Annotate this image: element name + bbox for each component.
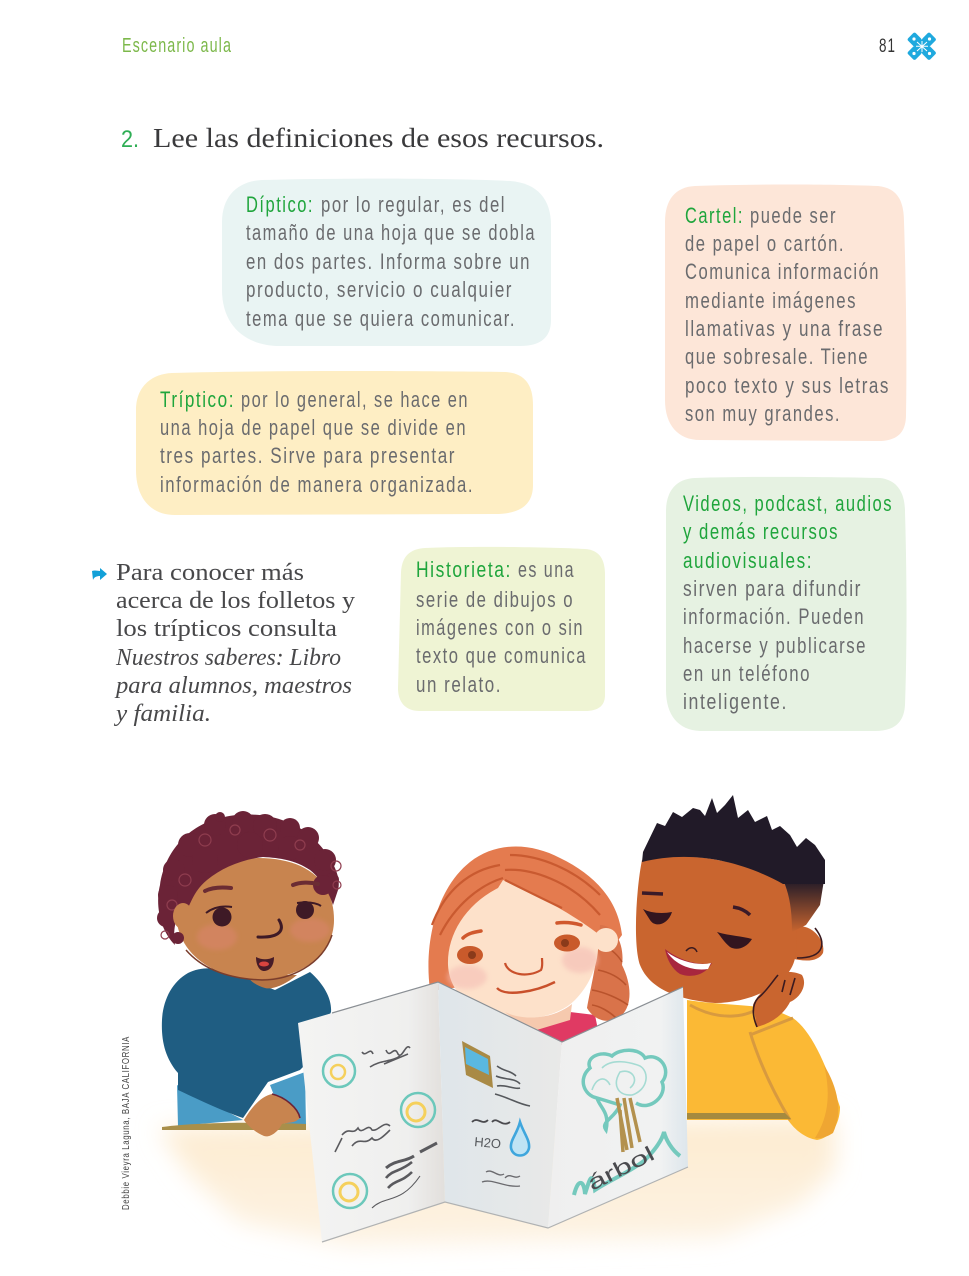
yellow sweater (687, 1000, 840, 1140)
panel: Díptico definition: tamaño de una hoja que se dobla (246, 220, 536, 245)
panel: Díptico definition: producto, servicio o cualquier (246, 277, 513, 302)
table (158, 1118, 835, 1246)
panel: Historieta definition: un relato. (416, 672, 502, 697)
panel: Videos, podcast, audios definition: información. Pueden (683, 604, 865, 629)
right panel (548, 987, 688, 1228)
child: girl with red braid (428, 846, 630, 1045)
panel: Videos, podcast, audios definition: hacerse y publicarse (683, 633, 867, 658)
panel: Cartel definition: poco texto y sus letras (685, 373, 890, 398)
table edge (687, 1113, 791, 1119)
panel: Díptico definition: tema que se quiera comunicar. (246, 306, 516, 331)
panel: Videos, podcast, audios definition: Videos, podcast, audios (683, 491, 893, 516)
handwritten word on leaflet (574, 1132, 680, 1195)
panel: Historieta definition: es una (518, 557, 575, 582)
spiky hair (642, 795, 825, 884)
panel: Cartel definition: mediante imágenes (685, 288, 857, 313)
left panel doodles (323, 1047, 437, 1208)
panel: Historieta definition: serie de dibujos o (416, 587, 574, 612)
leaflet (298, 982, 688, 1242)
panel: Videos, podcast, audios definition: inteligente. (683, 689, 788, 714)
page number: 81 (879, 36, 896, 57)
smile (665, 949, 712, 976)
cheeks (447, 965, 487, 989)
handwritten word on leaflet: árbol (584, 1142, 658, 1195)
eyebrows (642, 893, 750, 915)
panel: Historieta definition: Historieta: (416, 557, 512, 582)
nose and mouth (505, 958, 542, 974)
icon: blue arrow (92, 568, 107, 580)
nose (686, 948, 697, 952)
H2O note: H2O (474, 1134, 502, 1151)
braid (587, 925, 630, 1021)
panel: Díptico definition: Díptico: (246, 192, 314, 217)
hand (244, 1094, 300, 1136)
panel: Tríptico definition: por lo general, se hace en (241, 387, 469, 412)
text block: consult Nuestros saberes: y familia. (114, 701, 211, 727)
text block: consult Nuestros saberes: Nuestros saberes: Libro (115, 645, 341, 671)
mouth (256, 957, 274, 971)
panel: Díptico definition: por lo regular, es del (321, 192, 506, 217)
nose (258, 920, 281, 937)
panel: Cartel definition: Cartel: (685, 203, 744, 228)
tree drawing (583, 1050, 666, 1152)
middle panel (438, 982, 562, 1228)
left panel (298, 982, 445, 1242)
chin line (186, 935, 332, 980)
heading: activity 2: Lee las definiciones de esos recursos. (153, 123, 604, 153)
text block: consult Nuestros saberes: acerca de los folletos y (116, 588, 355, 614)
heading: activity 2: 2. (121, 126, 139, 153)
lighter blue sleeve (177, 1072, 306, 1126)
hand on cheek (753, 972, 804, 1027)
panel: Tríptico definition: una hoja de papel que se divide en (160, 415, 467, 440)
panel: Videos, podcast, audios definition: sirven para difundir (683, 576, 862, 601)
shirt (535, 1012, 600, 1045)
panel: Videos, podcast, audios definition (666, 477, 906, 731)
panel: Cartel definition: puede ser (750, 203, 837, 228)
panel: Historieta definition (398, 547, 605, 711)
head (636, 856, 797, 1003)
eyes (643, 909, 672, 924)
child: boy with curly hair (157, 811, 341, 1136)
panel: Historieta definition: texto que comunica (416, 643, 587, 668)
ear (790, 926, 823, 961)
curly hair (157, 811, 339, 945)
panel: Cartel definition: que sobresale. Tiene (685, 344, 869, 369)
child: boy with spiky hair (636, 795, 840, 1140)
hair fade at the temple (783, 880, 824, 932)
eyebrows (463, 923, 581, 938)
neck (247, 975, 297, 988)
eyes (457, 946, 483, 964)
panel: Historieta definition: imágenes con o sin (416, 615, 584, 640)
sleeve seam (690, 1003, 793, 1120)
text block: consult Nuestros saberes: Para conocer más (116, 560, 304, 586)
panel: Videos, podcast, audios definition: audiovisuales: (683, 548, 813, 573)
hair strands (432, 855, 600, 935)
hair (428, 846, 622, 990)
illustrator credit: Debbie Vieyra Laguna, BAJA CALIFORNIA (121, 1036, 132, 1210)
text block: consult Nuestros saberes (114, 560, 355, 727)
panel: Díptico definition (222, 179, 551, 346)
panel: Cartel definition: de papel o cartón. (685, 231, 845, 256)
head (176, 858, 334, 979)
eyebrows (205, 883, 318, 891)
panel: Videos, podcast, audios definition: en un teléfono (683, 661, 811, 686)
cheeks (197, 924, 237, 950)
text block: consult Nuestros saberes: los trípticos consulta (116, 616, 337, 642)
eyes (212, 908, 232, 926)
ear (173, 903, 193, 929)
neck shade (505, 1004, 572, 1032)
panel: Tríptico definition (136, 371, 533, 515)
panel: Cartel definition: Comunica información (685, 259, 880, 284)
ear (594, 928, 618, 952)
panel: Tríptico definition: información de manera organizada. (160, 472, 474, 497)
water drop (511, 1122, 529, 1156)
illustration: three children reading a leaflet (157, 795, 840, 1246)
table edge (162, 1123, 306, 1130)
panel: Cartel definition: son muy grandes. (685, 401, 841, 426)
section label: Escenario aula: Escenario aula (122, 35, 232, 57)
panel: Tríptico definition: tres partes. Sirve para presentar (160, 443, 456, 468)
panel: Díptico definition: en dos partes. Informa sobre un (246, 249, 531, 274)
face (448, 880, 598, 1018)
icon: blue knot emblem (907, 32, 937, 61)
text block: consult Nuestros saberes: para alumnos, maestros (114, 673, 352, 699)
panel: Cartel definition: llamativas y una frase (685, 316, 884, 341)
panel: Tríptico definition: Tríptico: (160, 387, 235, 412)
sweater (162, 968, 331, 1118)
panel: Cartel definition (665, 184, 906, 441)
panel: Videos, podcast, audios definition: y demás recursos (683, 519, 839, 544)
middle panel doodles (462, 1041, 530, 1186)
